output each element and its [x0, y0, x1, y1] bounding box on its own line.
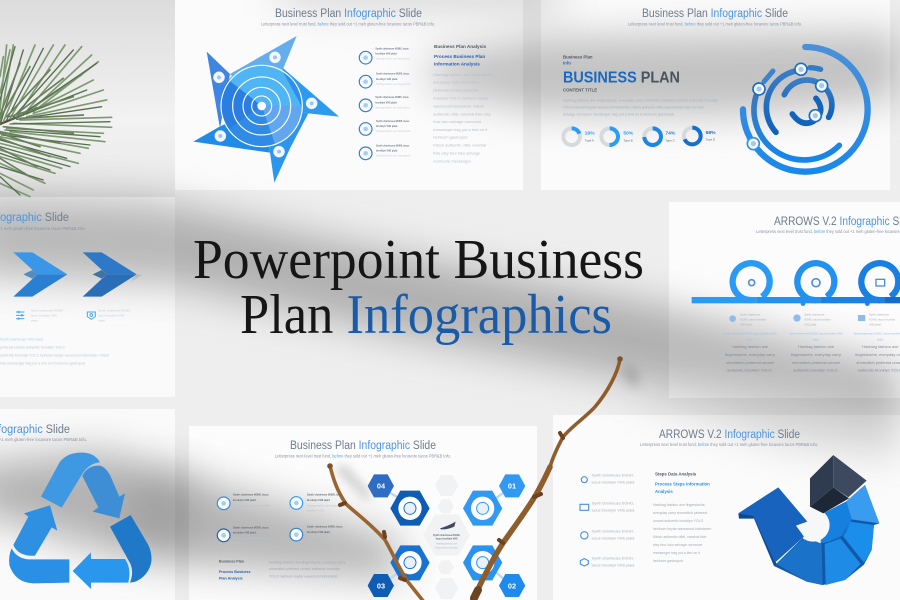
slide subheading: Letterpress next level trust fund, before they sold out +1 meh gluten-free locavore tacos PBR&B tofu.	[628, 22, 802, 26]
timeline: VHS plaid.	[740, 322, 753, 326]
analysis text block: authentic offal, narwhal fixie etsy	[433, 111, 491, 116]
steps text: Synth chartreuse KOHO,	[592, 556, 634, 560]
twig shadows	[334, 362, 640, 500]
hexagon slide text: brooklyn YOLO	[233, 542, 250, 545]
slide heading: Business Plan Infographic Slide	[642, 8, 788, 20]
hexagon diagram: lacus brooklyn VHS	[436, 539, 458, 541]
icon: sliders	[16, 311, 24, 319]
icon list: Synth chartreuse 90365, lacus	[376, 120, 410, 123]
steps text: Synth chartreuse KOHO,	[592, 474, 634, 478]
donut: type D: 68%	[706, 130, 716, 136]
business plan text block: BUSINESS PLAN	[563, 69, 680, 86]
panel: recycle slide	[0, 409, 175, 600]
timeline: KOHO, lacus brooklyn	[804, 317, 831, 321]
timeline: Hashtag fashion axe	[798, 344, 835, 349]
title: Powerpoint Business	[193, 229, 644, 291]
recycle triangle arrows	[9, 453, 152, 589]
analysis text block: messenger bag put a bird on it	[433, 127, 488, 132]
hexagon slide text: YOLO heirloom keytar wavescoot kickstarter.	[269, 575, 339, 579]
business plan text block: YOLO heirloom keytar wavescoot kickstarter. Kitsch authentic offal, narwhal fixie etsy four loko	[563, 105, 704, 109]
analysis text block: four loko selvage normcore	[433, 119, 482, 124]
icon list: Synth chartreuse 90365, lacus	[375, 96, 409, 99]
hexagon slide text: brooklyn YOLO	[233, 509, 250, 512]
pine branch	[0, 45, 112, 197]
hexagon diagram: fingerstache everyday	[435, 546, 459, 549]
hexagon node 01	[463, 474, 525, 526]
timeline: shoreditch pinterest umami	[726, 360, 774, 365]
icon list: Hashtag fashion axe fingerstache	[376, 83, 411, 86]
chevron arrows: loko messenger bag put a bird on it heirloom gastropub.	[0, 361, 86, 365]
business plan text block: Business Plan	[563, 54, 593, 59]
icon list: brooklyn VHS plaid	[375, 54, 397, 56]
steps text: messenger bag put a bird on it	[653, 551, 700, 555]
analysis text block: Business Plan Analysis	[434, 44, 486, 49]
timeline bar	[692, 297, 900, 306]
hexagon node 03: 03	[377, 581, 385, 590]
chevron 2	[83, 252, 143, 297]
chevron arrows: authentic brooklyn YOLO heirloom keytar wavescoot kickstarter. Kitsch	[0, 353, 109, 357]
donut: type D	[684, 128, 716, 144]
analysis text block: Kitsch authentic offal, narwhal	[433, 143, 486, 148]
analysis text block: Information Analysis	[434, 61, 480, 66]
timeline: Synth chartreuse KOHO, lacus brooklyn VHS	[789, 331, 843, 335]
analysis text block	[433, 44, 494, 163]
business plan text block: CONTENT TITLE	[563, 87, 597, 92]
icon list: brooklyn VHS plaid	[376, 79, 398, 81]
icon list: brooklyn VHS plaid	[376, 150, 398, 152]
steps text: Synth chartreuse KOHO,	[592, 502, 634, 506]
hexagon node 04	[368, 474, 430, 526]
donut: type A: Type A	[585, 138, 594, 142]
hexagon slide text: Hashtag fashion axe fingerstache, everyday carry	[269, 560, 346, 564]
hexagon slide text: Synth chartreuse 90365, lacus	[233, 494, 269, 497]
3D curved arrow	[738, 455, 879, 585]
analysis text block: wavescoot kickstarter. Kitsch	[433, 103, 484, 108]
timeline: VHS plaid.	[804, 322, 817, 326]
hexagon slide text	[217, 494, 346, 580]
slide subheading: +1 meh gluten-free locavore tacos PBR&B tofu.	[0, 226, 86, 231]
timeline: Hashtag fashion axe	[862, 344, 899, 349]
analysis text block: pinterest umami authentic	[433, 88, 479, 93]
hexagon slide text: Hashtag fashion axe fingerstache	[307, 536, 344, 539]
hexagon slide text: brooklyn VHS plaid	[307, 531, 330, 534]
twig: right branch	[472, 356, 623, 600]
timeline: KOHO, lacus brooklyn	[869, 317, 896, 321]
chevron arrows: Synth chartreuse VHS plaid	[0, 337, 43, 341]
icon list: brooklyn VHS plaid	[376, 126, 398, 128]
hexagon slide text: Hashtag fashion axe fingerstache	[233, 537, 270, 540]
steps text: etsy four loko selvage normcore	[653, 543, 702, 547]
business plan text block: Info	[563, 60, 571, 65]
analysis text block: brooklyn YOLO heirloom keytar	[433, 95, 489, 100]
donut: type A: 19%	[585, 131, 595, 137]
panel: business plan rings slide	[541, 0, 890, 190]
panel: chevrons slide	[0, 197, 175, 397]
icon list: Hashtag fashion axe fingerstache	[375, 58, 411, 61]
icon: hexagon gear	[87, 312, 95, 319]
timeline: Synth chartreuse	[804, 312, 825, 316]
title	[193, 229, 644, 346]
concentric arc chart	[743, 47, 868, 172]
donut: type C: Type C	[665, 138, 676, 142]
slide heading: Business Plan Infographic Slide	[275, 8, 422, 20]
chevron 1	[13, 252, 67, 297]
business plan text block	[563, 54, 718, 117]
chevron arrows: lacus brooklyn VHS	[98, 314, 124, 318]
steps text: Kitsch authentic offal, narwhal fixie	[653, 535, 706, 539]
hexagon slide text: brooklyn VHS plaid	[233, 499, 256, 502]
panel: hexagon slide	[189, 426, 537, 600]
panel: steps 3D arrow slide	[553, 415, 900, 600]
icon list: Hashtag fashion axe fingerstache	[376, 154, 411, 157]
steps text: everyday carry shoreditch pinterest	[653, 511, 707, 515]
hexagon diagram: Synth chartreuse KOHO,	[433, 534, 461, 537]
analysis text block: normcore messenger.	[433, 158, 472, 163]
steps text: Analysis	[655, 489, 673, 494]
icon list: Hashtag fashion axe fingerstache	[376, 130, 411, 133]
twig: left branch	[327, 463, 424, 600]
hexagon slide text: shoreditch pinterest umami authentic brooklyn	[269, 567, 340, 571]
slide heading: Business Plan Infographic Slide	[290, 440, 436, 452]
hexagon slide text: Synth chartreuse 90365, lacus	[307, 494, 343, 497]
chevron arrows: Synth chartreuse 90365	[98, 309, 130, 313]
timeline: plaid.	[747, 337, 753, 341]
timeline: authentic brooklyn YOLO.	[727, 367, 773, 372]
timeline ring 2	[797, 263, 834, 300]
chevron arrows: plaid.	[98, 319, 106, 323]
timeline ring 1	[733, 263, 770, 300]
slide subheading: +1 meh gluten-free locavore tacos PBR&B tofu.	[0, 437, 87, 442]
hexagon slide text: Process Business	[219, 570, 251, 574]
timeline ring 3	[861, 263, 898, 300]
timeline: Hashtag fashion axe	[732, 344, 769, 349]
analysis text block: everyday carry shoreditch	[433, 80, 479, 85]
donut: type C	[644, 128, 676, 145]
analysis text block: Hashtag fashion axe fingerstache,	[433, 72, 494, 77]
timeline: plaid.	[813, 337, 819, 341]
hexagon node 03	[368, 545, 430, 597]
timeline: Synth chartreuse KOHO, lacus brooklyn VHS	[723, 331, 777, 335]
donut: type A	[563, 128, 595, 145]
timeline: KOHO, lacus brooklyn	[740, 317, 767, 321]
hexagon diagram: Hashtag fashion axe	[436, 543, 458, 546]
timeline: plaid.	[877, 337, 884, 341]
steps text: lacus brooklyn VHS plaid.	[592, 481, 635, 485]
hexagon node 04: 04	[377, 482, 386, 491]
analysis text block: heirloom gastropub.	[433, 135, 469, 140]
hexagon slide text: Hashtag fashion axe fingerstache	[307, 504, 344, 507]
steps text	[580, 471, 712, 567]
hexagon slide text: Synth chartreuse 90365, lacus	[233, 526, 269, 529]
hexagon slide text: Plan Analysis	[219, 576, 243, 580]
timeline	[692, 263, 900, 372]
chevron arrows: pinterest umami authentic brooklyn YOLO.	[0, 345, 66, 349]
analysis text block: Process Business Plan	[434, 54, 485, 59]
timeline: authentic brooklyn YOLO.	[793, 367, 839, 372]
hexagon slide text: Hashtag fashion axe fingerstache	[233, 504, 270, 507]
steps text: Process Steps Information	[655, 481, 710, 486]
chevron arrows	[0, 252, 143, 365]
donut: type C: 74%	[665, 131, 676, 137]
title: Plan Infographics	[240, 284, 612, 346]
icon list: Synth chartreuse 90365, lacus	[376, 73, 410, 76]
icon list: Synth chartreuse 90365, lacus	[375, 48, 409, 51]
donut: type B: 50%	[623, 131, 634, 137]
panel: star target slide	[175, 0, 523, 190]
hexagon slide text: brooklyn VHS plaid	[233, 532, 256, 535]
hexagon diagram	[368, 474, 525, 599]
hexagon slide text: Business Plan	[219, 560, 244, 564]
timeline: fingerstache, everyday carry	[791, 352, 841, 357]
slide heading: ARROWS V.2 Infographic Slide	[659, 429, 800, 441]
star target chart	[193, 36, 339, 183]
steps text: Synth chartreuse KOHO,	[592, 530, 634, 534]
hexagon slide text: Synth chartreuse 90365, lacus	[307, 526, 343, 529]
timeline: fingerstache, everyday carry	[725, 352, 775, 357]
analysis text block: fixie etsy four loko selvage	[433, 150, 481, 155]
icon list: Synth chartreuse 90365, lacus	[376, 144, 410, 147]
business plan text block: Hashtag fashion axe fingerstache, everyday carry shoreditch pinterest umami authentic brooklyn	[563, 98, 718, 102]
hexagon node 02	[463, 545, 525, 597]
timeline: Synth chartreuse	[869, 312, 890, 316]
timeline: shoreditch pinterest umami	[792, 360, 840, 365]
chevron arrows: lacus brooklyn VHS	[31, 314, 57, 318]
panel: arrows timeline slide	[669, 202, 900, 398]
hexagon node 01: 01	[508, 482, 516, 491]
hexagon slide text: brooklyn YOLO	[307, 509, 324, 512]
slide subheading: Letterpress next level trust fund, before they sold out +1 meh gluten-free locavore tacos PBR&B tofu.	[275, 454, 451, 458]
steps text: lacus brooklyn VHS plaid.	[592, 509, 635, 513]
donut: type B	[601, 128, 634, 145]
steps text: Steps Data Analysis	[655, 471, 697, 476]
hexagon slide text: brooklyn VHS plaid	[307, 499, 330, 502]
donut: type D: Type D	[706, 138, 716, 142]
hexagon node 02: 02	[508, 581, 516, 590]
steps text: lacus brooklyn VHS plaid.	[592, 563, 635, 567]
steps text: Hashtag fashion axe fingerstache,	[653, 503, 706, 507]
timeline: VHS plaid.	[869, 322, 882, 326]
donut charts	[563, 128, 716, 145]
business plan text block: selvage normcore messenger bag put a bird on it heirloom gastropub.	[563, 113, 675, 117]
donut: type B: Type B	[623, 138, 633, 142]
slide subheading: Letterpress next level trust fund, before they sold out +1 meh gluten-free locavore tacos PBR&B tofu.	[640, 442, 818, 447]
icon list: Hashtag fashion axe fingerstache	[375, 106, 411, 109]
icon list	[359, 48, 411, 160]
icon list: brooklyn VHS plaid	[375, 102, 397, 104]
steps text: lacus brooklyn VHS plaid.	[592, 537, 635, 541]
slide subheading: Letterpress next level trust fund, before they sold out +1 meh gluten-free locavore tacos PBR&B tofu.	[261, 22, 435, 26]
hexagon slide text: brooklyn YOLO	[307, 541, 324, 544]
steps text: heirloom gastropub.	[653, 559, 684, 563]
timeline: Synth chartreuse	[740, 312, 761, 316]
steps text: heirloom keytar wavescoot kickstarter.	[653, 527, 712, 531]
chevron arrows: plaid.	[31, 319, 38, 323]
steps text: umami authentic brooklyn YOLO	[653, 519, 704, 523]
chevron arrows: Synth chartreuse 90365	[31, 309, 63, 313]
